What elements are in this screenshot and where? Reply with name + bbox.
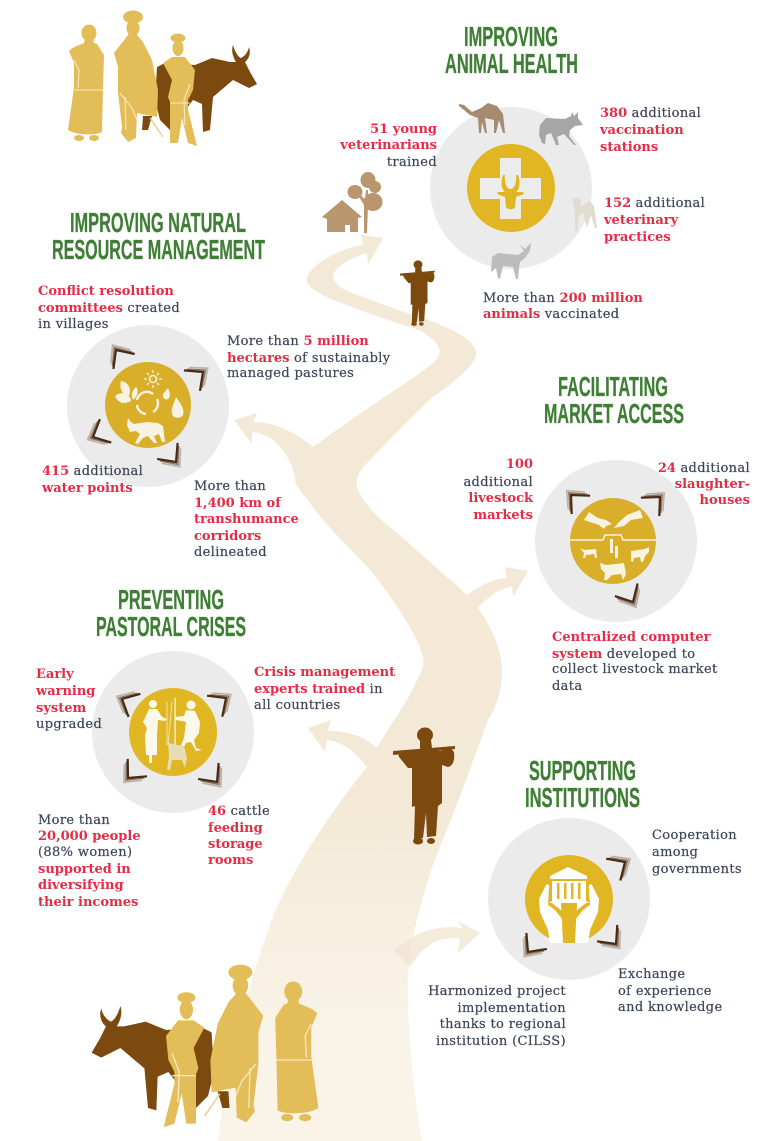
text: exchange: Exchange	[618, 967, 685, 982]
text: exchange	[618, 967, 723, 1015]
text: computer system: system developed to	[552, 647, 695, 662]
text: conflict resolution	[38, 284, 180, 332]
icon: goat	[572, 197, 597, 231]
text: vaccination stations	[599, 106, 701, 155]
heading: PREVENTING	[118, 584, 224, 615]
text: water points: 415 additional	[42, 464, 143, 479]
text: crisis management: Crisis management	[254, 665, 395, 680]
text: transhumance corridors: delineated	[194, 545, 267, 560]
heading: FACILITATING	[558, 371, 668, 402]
text: vaccination stations: stations	[600, 140, 658, 155]
text: transhumance corridors	[194, 479, 299, 560]
text: managed pastures: managed pastures	[227, 366, 354, 381]
text: conflict resolution: committees created	[38, 301, 180, 316]
text: water points: water points	[41, 481, 133, 496]
panel: improving natural resource management	[38, 207, 391, 560]
text: animals vaccinated	[483, 291, 643, 322]
text: people supported: (88% women)	[38, 845, 132, 860]
text: crisis management: experts trained in	[254, 682, 383, 697]
panel: improving animal health	[339, 21, 705, 322]
heading: ANIMAL HEALTH	[445, 48, 578, 79]
heading	[445, 21, 578, 79]
circle	[92, 651, 254, 813]
text: harmonized implementation: thanks to regional	[440, 1017, 566, 1032]
heading	[52, 207, 265, 265]
heading: SUPPORTING	[529, 755, 636, 786]
text: people supported	[38, 813, 141, 910]
circle	[67, 325, 229, 487]
chevrons	[82, 338, 216, 475]
text: cattle feeding: 46 cattle	[208, 804, 270, 819]
panel: facilitating market access	[463, 371, 750, 694]
circle	[430, 107, 592, 269]
text: cattle feeding	[208, 804, 270, 868]
text: people supported: 20,000 people	[38, 829, 141, 844]
text: livestock markets	[463, 457, 534, 523]
icon: cross with bull head	[467, 144, 555, 232]
text: cattle feeding: feeding	[208, 821, 263, 836]
text: slaughterhouses: 24 additional	[658, 461, 750, 476]
heading: RESOURCE MANAGEMENT	[52, 234, 265, 265]
text: cooperation: governments	[652, 862, 742, 877]
text: slaughterhouses	[658, 461, 750, 508]
circle	[535, 460, 697, 622]
heading: PASTORAL CRISES	[96, 611, 246, 642]
people and cow, bottom	[92, 965, 318, 1127]
text: early warning: system	[36, 701, 86, 716]
text: managed pastures	[227, 334, 391, 381]
text: people supported: diversifying	[38, 878, 124, 893]
text: livestock markets: livestock	[468, 491, 534, 506]
text: early warning	[35, 667, 102, 732]
heading: IMPROVING	[464, 21, 558, 52]
text: harmonized implementation: Harmonized project	[428, 984, 566, 999]
text: slaughterhouses: slaughter-	[675, 477, 750, 492]
text: animals vaccinated: More than 200 million	[483, 291, 643, 306]
text: managed pastures: More than 5 million	[227, 334, 369, 349]
heading	[525, 755, 640, 813]
text: harmonized implementation: implementation	[457, 1001, 566, 1016]
text: young veterinarians: 51 young	[370, 122, 437, 137]
chevrons	[514, 848, 637, 965]
heading: INSTITUTIONS	[525, 782, 640, 813]
panel: preventing pastoral crises	[35, 584, 395, 910]
text: crisis management	[254, 665, 395, 713]
text: livestock markets: additional	[463, 475, 533, 490]
text: veterinary practices: 152 additional	[604, 196, 705, 211]
icon: hands holding institution	[525, 855, 613, 943]
text: cattle feeding: rooms	[208, 853, 253, 868]
icon: camel	[459, 103, 505, 133]
text: cattle feeding: storage	[208, 837, 263, 852]
text: young veterinarians: veterinarians	[339, 138, 437, 153]
text: computer system	[552, 630, 718, 694]
text: conflict resolution: in villages	[38, 317, 109, 332]
heading: MARKET ACCESS	[544, 398, 684, 429]
text: exchange: and knowledge	[618, 1000, 723, 1015]
icon: market exchange	[570, 498, 656, 584]
text: conflict resolution: Conflict resolution	[38, 284, 174, 299]
text: young veterinarians	[339, 122, 437, 170]
arrow: road to supporting institutions	[393, 921, 480, 967]
icon: sun, leaves, water, cow	[105, 362, 191, 448]
text: livestock markets: 100	[506, 457, 533, 472]
panel: supporting institutions	[428, 755, 742, 1049]
icon: herders and goat	[129, 688, 217, 776]
text: cooperation: among	[652, 845, 698, 860]
heading	[544, 371, 684, 429]
text: early warning: upgraded	[36, 717, 102, 732]
text: people supported: supported in	[38, 862, 131, 877]
icon: house and tree	[322, 172, 382, 233]
text: transhumance corridors: transhumance	[194, 512, 299, 527]
circle	[488, 818, 650, 980]
heading	[96, 584, 246, 642]
text: computer system: data	[552, 679, 582, 694]
text: exchange: of experience	[618, 984, 712, 999]
icon: grey bull	[539, 112, 583, 145]
text: computer system: collect livestock market	[552, 662, 718, 677]
text: early warning: Early	[36, 667, 74, 682]
text: cooperation: Cooperation	[652, 828, 737, 843]
farmer on the road, small	[400, 260, 435, 326]
text: harmonized implementation	[428, 984, 566, 1049]
text: people supported: More than	[38, 813, 110, 828]
text: computer system: Centralized computer	[552, 630, 711, 645]
text: cooperation	[652, 828, 742, 877]
chevrons	[111, 684, 238, 795]
text: veterinary practices: veterinary	[603, 213, 679, 228]
road with branching arrows	[218, 235, 528, 1141]
chevrons	[558, 482, 673, 614]
text: early warning: warning	[35, 684, 95, 699]
text: transhumance corridors: More than	[194, 479, 266, 494]
farmer on the road, large	[393, 728, 455, 844]
text: harmonized implementation: institution (CILSS)	[436, 1034, 566, 1049]
text: veterinary practices: practices	[604, 230, 671, 245]
people and cow, top	[68, 10, 257, 146]
text: animals vaccinated: animals vaccinated	[483, 307, 619, 322]
text: vaccination stations: 380 additional	[600, 106, 701, 121]
text: young veterinarians: trained	[387, 155, 437, 170]
text: people supported: their incomes	[38, 895, 138, 910]
text: managed pastures: hectares of sustainably	[227, 351, 391, 366]
text: slaughterhouses: houses	[700, 493, 750, 508]
icon: white cow	[491, 243, 531, 279]
text: livestock markets: markets	[473, 508, 533, 523]
heading: IMPROVING NATURAL	[70, 207, 246, 238]
text: water points	[41, 464, 143, 496]
text: crisis management: all countries	[254, 698, 341, 713]
text: transhumance corridors: corridors	[194, 529, 261, 544]
text: veterinary practices	[603, 196, 705, 245]
text: transhumance corridors: 1,400 km of	[194, 496, 282, 511]
text: vaccination stations: vaccination	[599, 123, 684, 138]
